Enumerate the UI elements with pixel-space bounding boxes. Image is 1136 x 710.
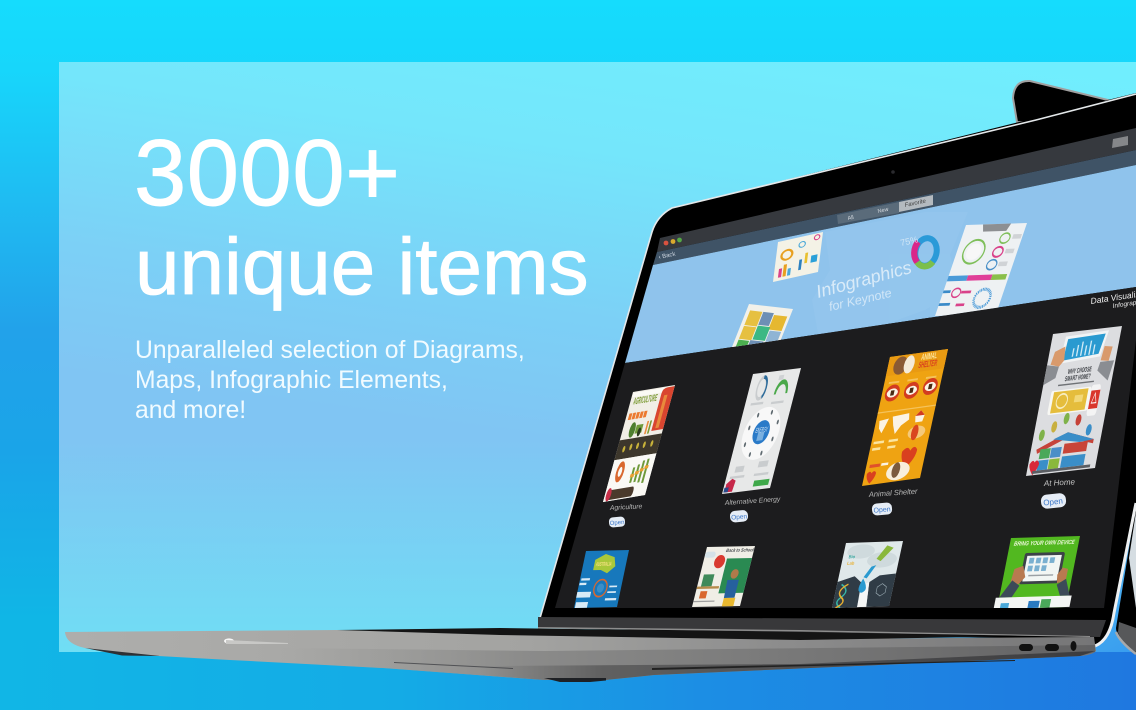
animal shelter open button: Open — [873, 506, 891, 515]
alternative energy open button — [730, 510, 748, 523]
at home label: At Home — [1043, 477, 1076, 488]
underside notch line — [394, 662, 513, 669]
window header background — [625, 165, 1136, 363]
card: science dna — [832, 541, 903, 608]
tab control: New — [877, 207, 889, 215]
laptop base — [65, 627, 1096, 682]
card: science dna: Bio — [848, 554, 856, 559]
tall infographic card — [935, 223, 1027, 316]
for Keynote heading: for Keynote — [828, 286, 893, 314]
Infographics heading: Infographics — [814, 257, 914, 302]
card: at home — [1026, 326, 1122, 476]
card: at home: WHY CHOOSE — [1067, 366, 1092, 376]
at home open button: Open — [1043, 496, 1063, 507]
second device behind, top corner — [1013, 81, 1108, 125]
faint world map — [818, 315, 946, 334]
subtitle text block: and more! — [135, 397, 246, 424]
agriculture label: Agriculture — [609, 503, 643, 512]
at home open button — [1040, 493, 1067, 509]
card: alternative energy: ENERGY — [754, 426, 769, 436]
donut chart — [911, 236, 940, 269]
card: australia: AUSTRALIA — [595, 561, 612, 568]
alternative energy label: Alternative Energy — [724, 496, 781, 507]
tab control: All — [847, 215, 854, 222]
underside foot — [544, 678, 606, 682]
subtitle text block — [135, 337, 525, 424]
port: headphone jack — [1070, 641, 1076, 651]
traffic lights — [664, 238, 682, 245]
card: animal shelter: SHELTER — [917, 358, 938, 371]
small chart card — [773, 232, 823, 282]
title: 3000+: 3000+ — [134, 120, 401, 225]
laptop lid — [540, 93, 1136, 646]
window toolbar band — [653, 150, 1136, 265]
base lower band — [280, 645, 1095, 680]
camera dot — [891, 170, 895, 174]
window content background — [555, 287, 1136, 608]
card: agriculture — [603, 385, 675, 502]
card: alternative energy — [722, 368, 801, 494]
underside shadow left — [85, 648, 160, 656]
port: usb-c two — [1045, 644, 1059, 651]
card: bring your own device — [994, 536, 1083, 609]
panel corner tint — [600, 520, 1136, 652]
donut percent: 75% — [899, 234, 919, 248]
port: usb-c one — [1019, 644, 1033, 651]
base dark underside — [480, 651, 1095, 680]
agriculture open button: Open — [610, 520, 625, 527]
tab control — [837, 195, 933, 224]
card: animal shelter: ANIMAL — [920, 350, 939, 363]
card: science dna: Lab — [847, 560, 855, 566]
agriculture open button — [609, 516, 625, 528]
tab control: Favorite — [904, 198, 927, 209]
subtitle text block: Maps, Infographic Elements, — [135, 367, 448, 394]
hinge highlight — [538, 627, 1090, 637]
panel: light blue backdrop — [59, 62, 1136, 652]
card: agriculture: AGRICULTURE — [632, 392, 659, 407]
laptop illustration — [65, 80, 1136, 682]
hinge gray strip — [538, 617, 1106, 637]
keyboard gap — [337, 628, 1000, 640]
lower color tile card — [732, 304, 793, 347]
second device at right edge — [1116, 505, 1136, 654]
title: unique items: unique items — [135, 222, 589, 311]
animal shelter label: Animal Shelter — [868, 487, 918, 499]
header artwork — [732, 223, 1027, 347]
content cards — [574, 286, 1136, 609]
subtitle text block: Unparalleled selection of Diagrams, — [135, 337, 525, 364]
card: australia — [574, 550, 629, 608]
top right toolbar button — [1112, 136, 1128, 148]
background bottom band — [0, 640, 1136, 710]
card: bring your own device: BRING YOUR OWN DEVICE — [1013, 540, 1076, 548]
card: back to school: Back to School — [726, 547, 755, 553]
window title bar — [657, 128, 1136, 252]
animal shelter open button — [872, 502, 892, 516]
card: back to school — [692, 546, 755, 607]
card: at home: SMART HOME? — [1064, 373, 1091, 384]
alternative energy open button: Open — [731, 513, 748, 522]
card: animal shelter — [862, 349, 948, 486]
thumb notch highlight — [224, 638, 288, 644]
underside notch right — [652, 660, 1015, 670]
back label: ‹ Back — [658, 251, 677, 261]
